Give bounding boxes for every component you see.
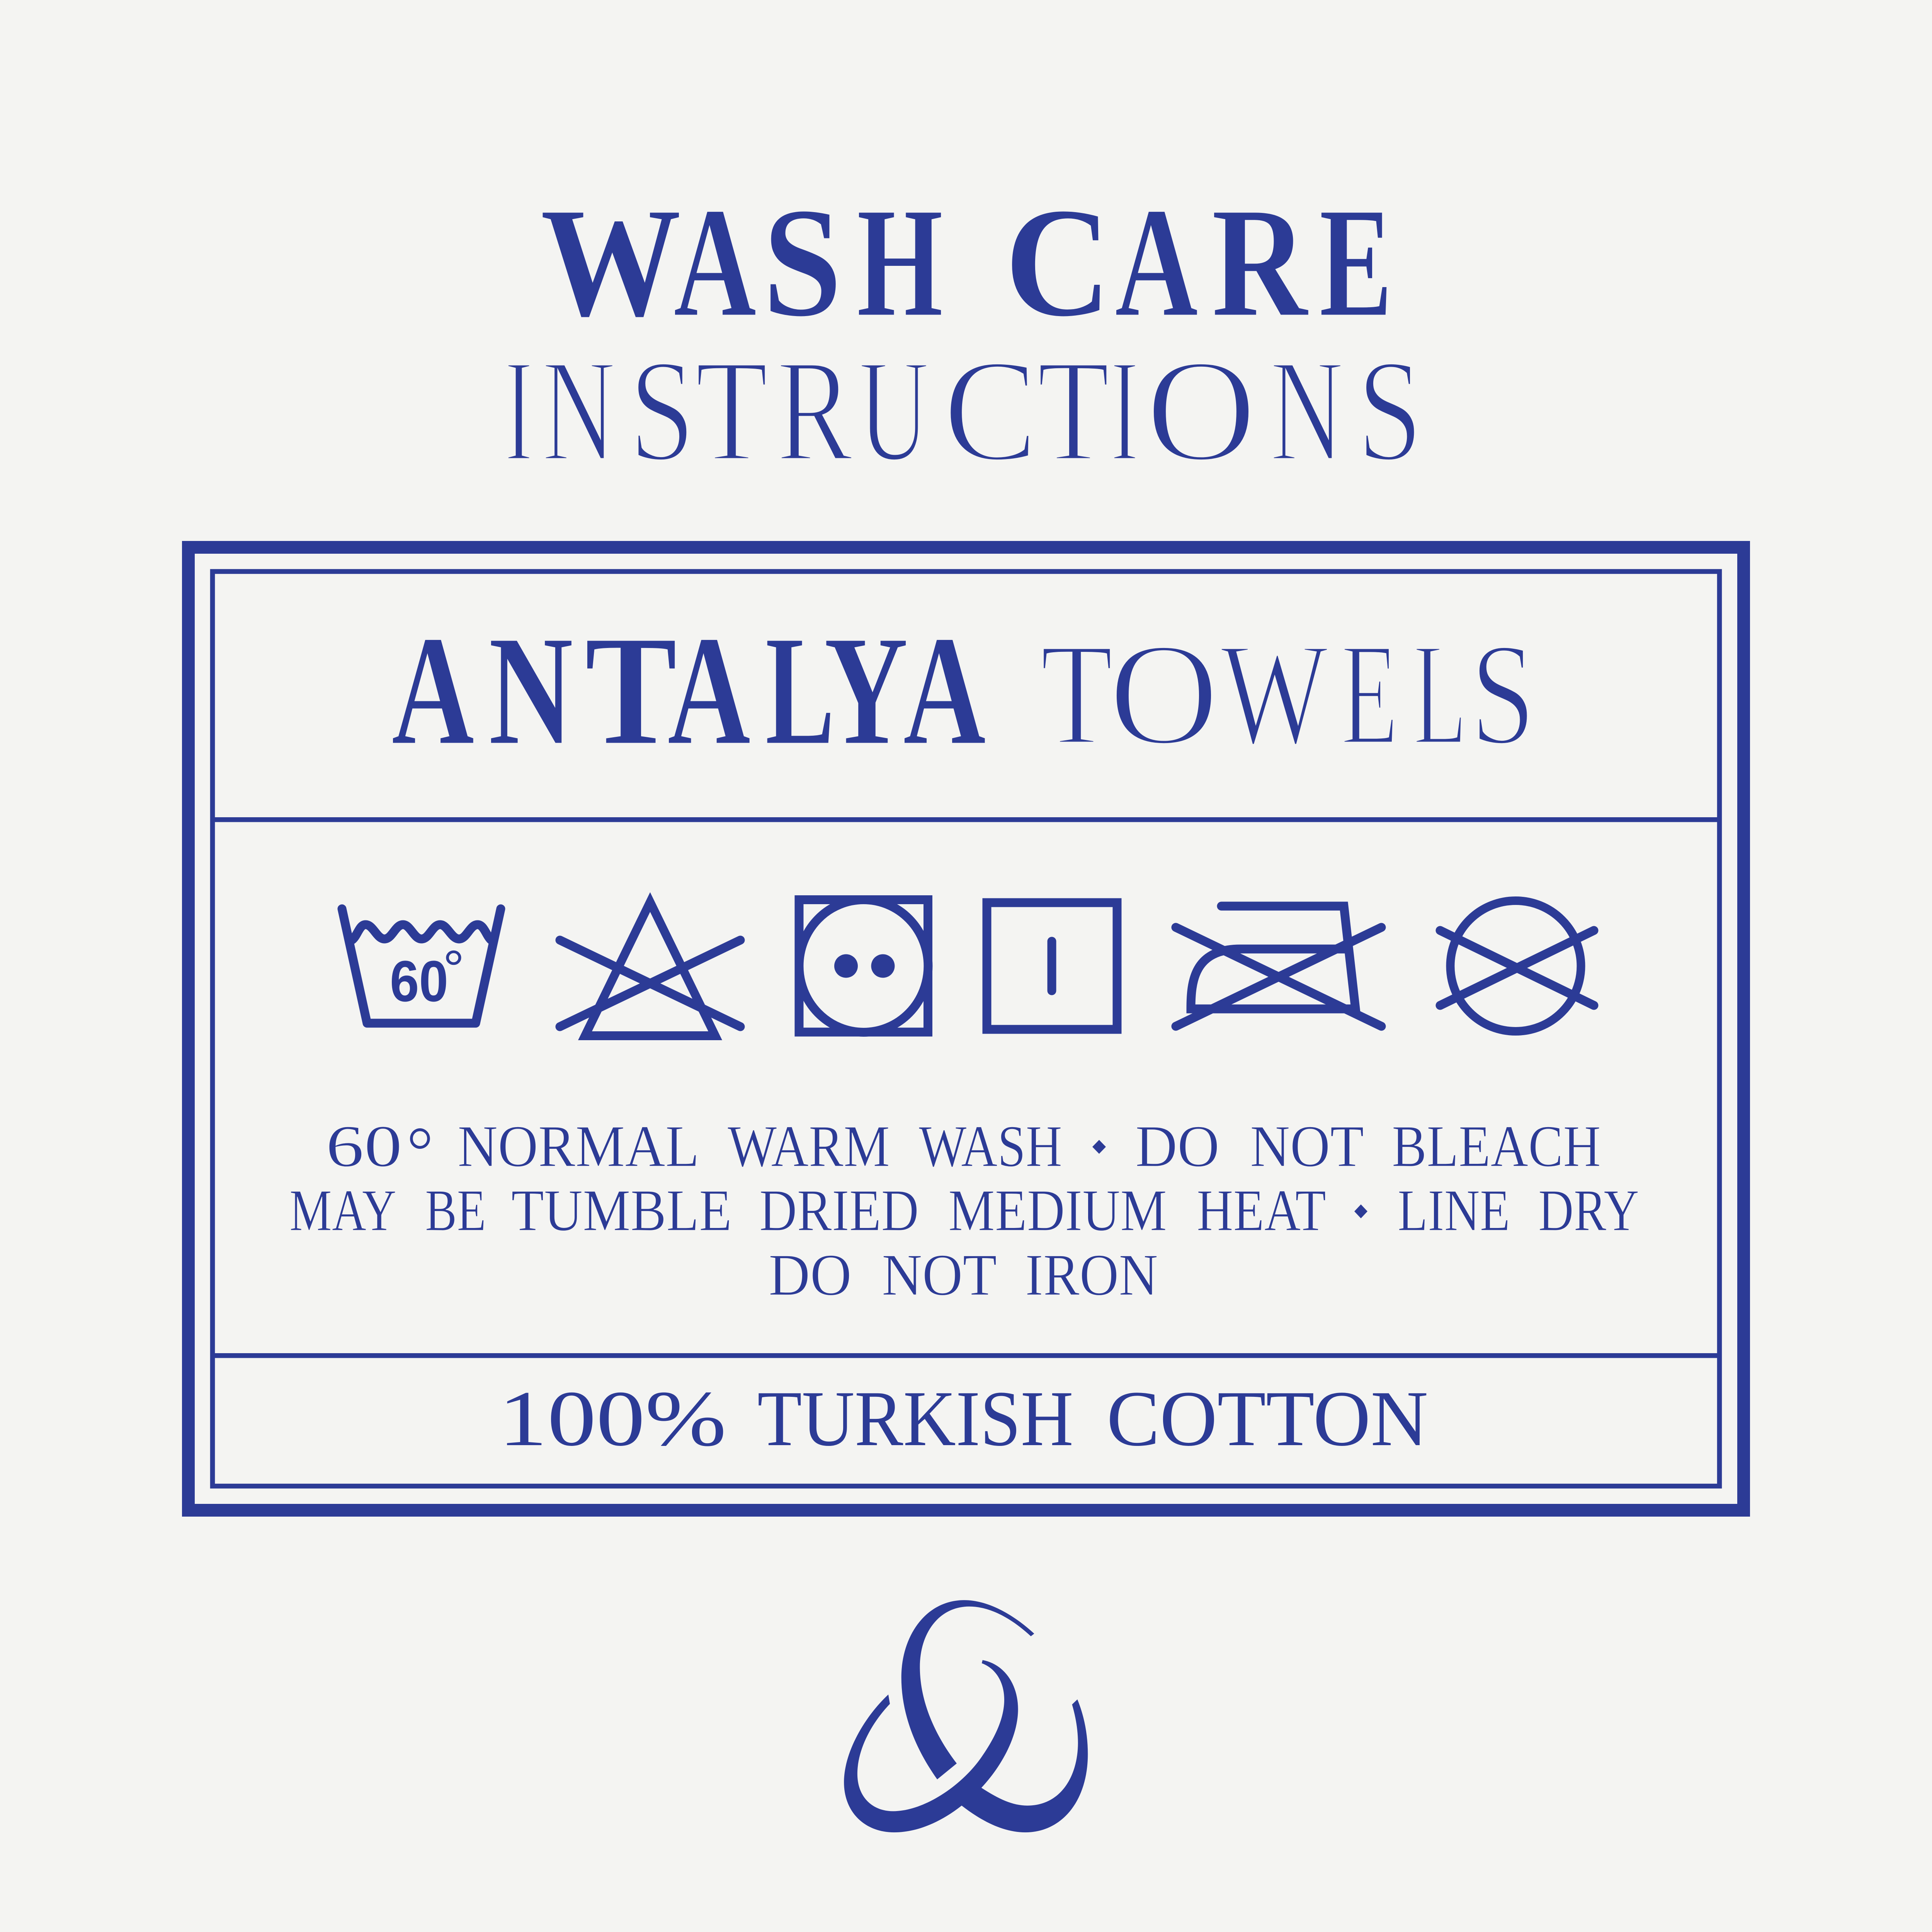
instruction line 2: BE: [425, 1178, 486, 1243]
divider: below brand: [213, 817, 1719, 822]
text block: care instructions: [289, 1112, 1639, 1308]
title line: instructions: T: [695, 329, 768, 492]
text: material: TURKISH: [757, 1375, 1073, 1463]
instruction line 1: NORMAL: [457, 1114, 699, 1179]
heading: brand name: Y: [824, 603, 908, 778]
icon: do not bleach: [560, 892, 740, 1040]
title line: instructions: N: [542, 329, 616, 492]
instruction line 1: °: [406, 1112, 434, 1189]
inner border: [213, 571, 1719, 1486]
instruction line 2: [289, 1178, 1639, 1243]
instruction line 1: WARM: [728, 1114, 890, 1179]
heading: brand name: A: [391, 603, 474, 778]
title: [504, 175, 1423, 492]
heading: brand name: L: [1413, 613, 1467, 776]
text: material: 100%: [498, 1375, 726, 1463]
instruction line 3: [769, 1242, 1158, 1308]
title line: instructions: T: [1037, 329, 1110, 492]
icon: tumble dry medium: [799, 900, 928, 1032]
instruction line 2: TUMBLE: [511, 1178, 732, 1243]
heading: brand name: L: [765, 603, 835, 778]
panel: care label frame: [189, 547, 1743, 1510]
title line: wash care: A: [1115, 175, 1198, 350]
icon: do not dry clean: [1440, 901, 1594, 1031]
outer border: [189, 547, 1743, 1510]
instruction line 1: [326, 1112, 1601, 1189]
text: material: [498, 1375, 1428, 1463]
icon: wash at 60 degrees: [342, 909, 501, 1023]
title line: instructions: C: [943, 329, 1038, 492]
instruction line 2: HEAT: [1197, 1178, 1326, 1243]
heading: brand name: A: [903, 603, 986, 778]
heading: brand name: N: [488, 603, 573, 778]
title line: wash care: W: [540, 175, 682, 350]
title line: wash care: [540, 175, 1393, 350]
title line: instructions: U: [859, 329, 929, 492]
instruction line 2: MAY: [289, 1178, 396, 1243]
heading: brand name: E: [1341, 613, 1398, 776]
icon: do not iron: [1176, 906, 1381, 1026]
title line: instructions: I: [504, 329, 533, 492]
instruction line 1: NOT: [1250, 1114, 1364, 1179]
title line: wash care: A: [673, 175, 757, 350]
instruction line 1: 60: [326, 1114, 402, 1179]
title line: wash care: S: [762, 175, 842, 350]
heading: brand name: [391, 603, 1536, 778]
icon: wash at 60 degrees: 60: [390, 949, 448, 1014]
instruction line 1: BLEACH: [1392, 1114, 1601, 1179]
title line: wash care: H: [857, 175, 943, 350]
divider: above material: [213, 1353, 1719, 1358]
instruction line 1: DO: [1135, 1114, 1219, 1179]
heading: brand name: O: [1109, 613, 1219, 776]
logo: ampersand knot: [844, 1600, 1088, 1832]
title line: instructions: R: [776, 329, 853, 492]
title line: instructions: I: [1110, 329, 1139, 492]
instruction line 2: DRY: [1538, 1178, 1639, 1243]
title line: instructions: N: [1270, 329, 1344, 492]
heading: brand name: A: [667, 603, 751, 778]
heading: brand name: T: [585, 603, 677, 778]
title line: wash care: C: [1004, 175, 1112, 350]
instruction line 1: WASH: [919, 1114, 1062, 1179]
icon: wash at 60 degrees: °: [443, 940, 464, 998]
icon: line dry: [987, 903, 1117, 1029]
title line: instructions: O: [1146, 329, 1257, 492]
instruction line 2: LINE: [1398, 1178, 1510, 1243]
instruction line 3: DO: [769, 1242, 852, 1308]
instruction line 2: DRIED: [759, 1178, 919, 1243]
heading: brand name: T: [1040, 613, 1113, 776]
title line: instructions: S: [629, 329, 695, 492]
title line: wash care: R: [1211, 175, 1309, 350]
instruction line 3: NOT: [882, 1242, 997, 1308]
title line: instructions: S: [1357, 329, 1423, 492]
instruction line 3: IRON: [1025, 1242, 1158, 1308]
title line: wash care: E: [1319, 175, 1393, 350]
instruction line 2: MEDIUM: [948, 1178, 1167, 1243]
icon row: [342, 892, 1594, 1040]
heading: brand name: S: [1470, 613, 1536, 776]
heading: brand name: W: [1220, 613, 1330, 776]
text: material: COTTON: [1107, 1375, 1428, 1463]
